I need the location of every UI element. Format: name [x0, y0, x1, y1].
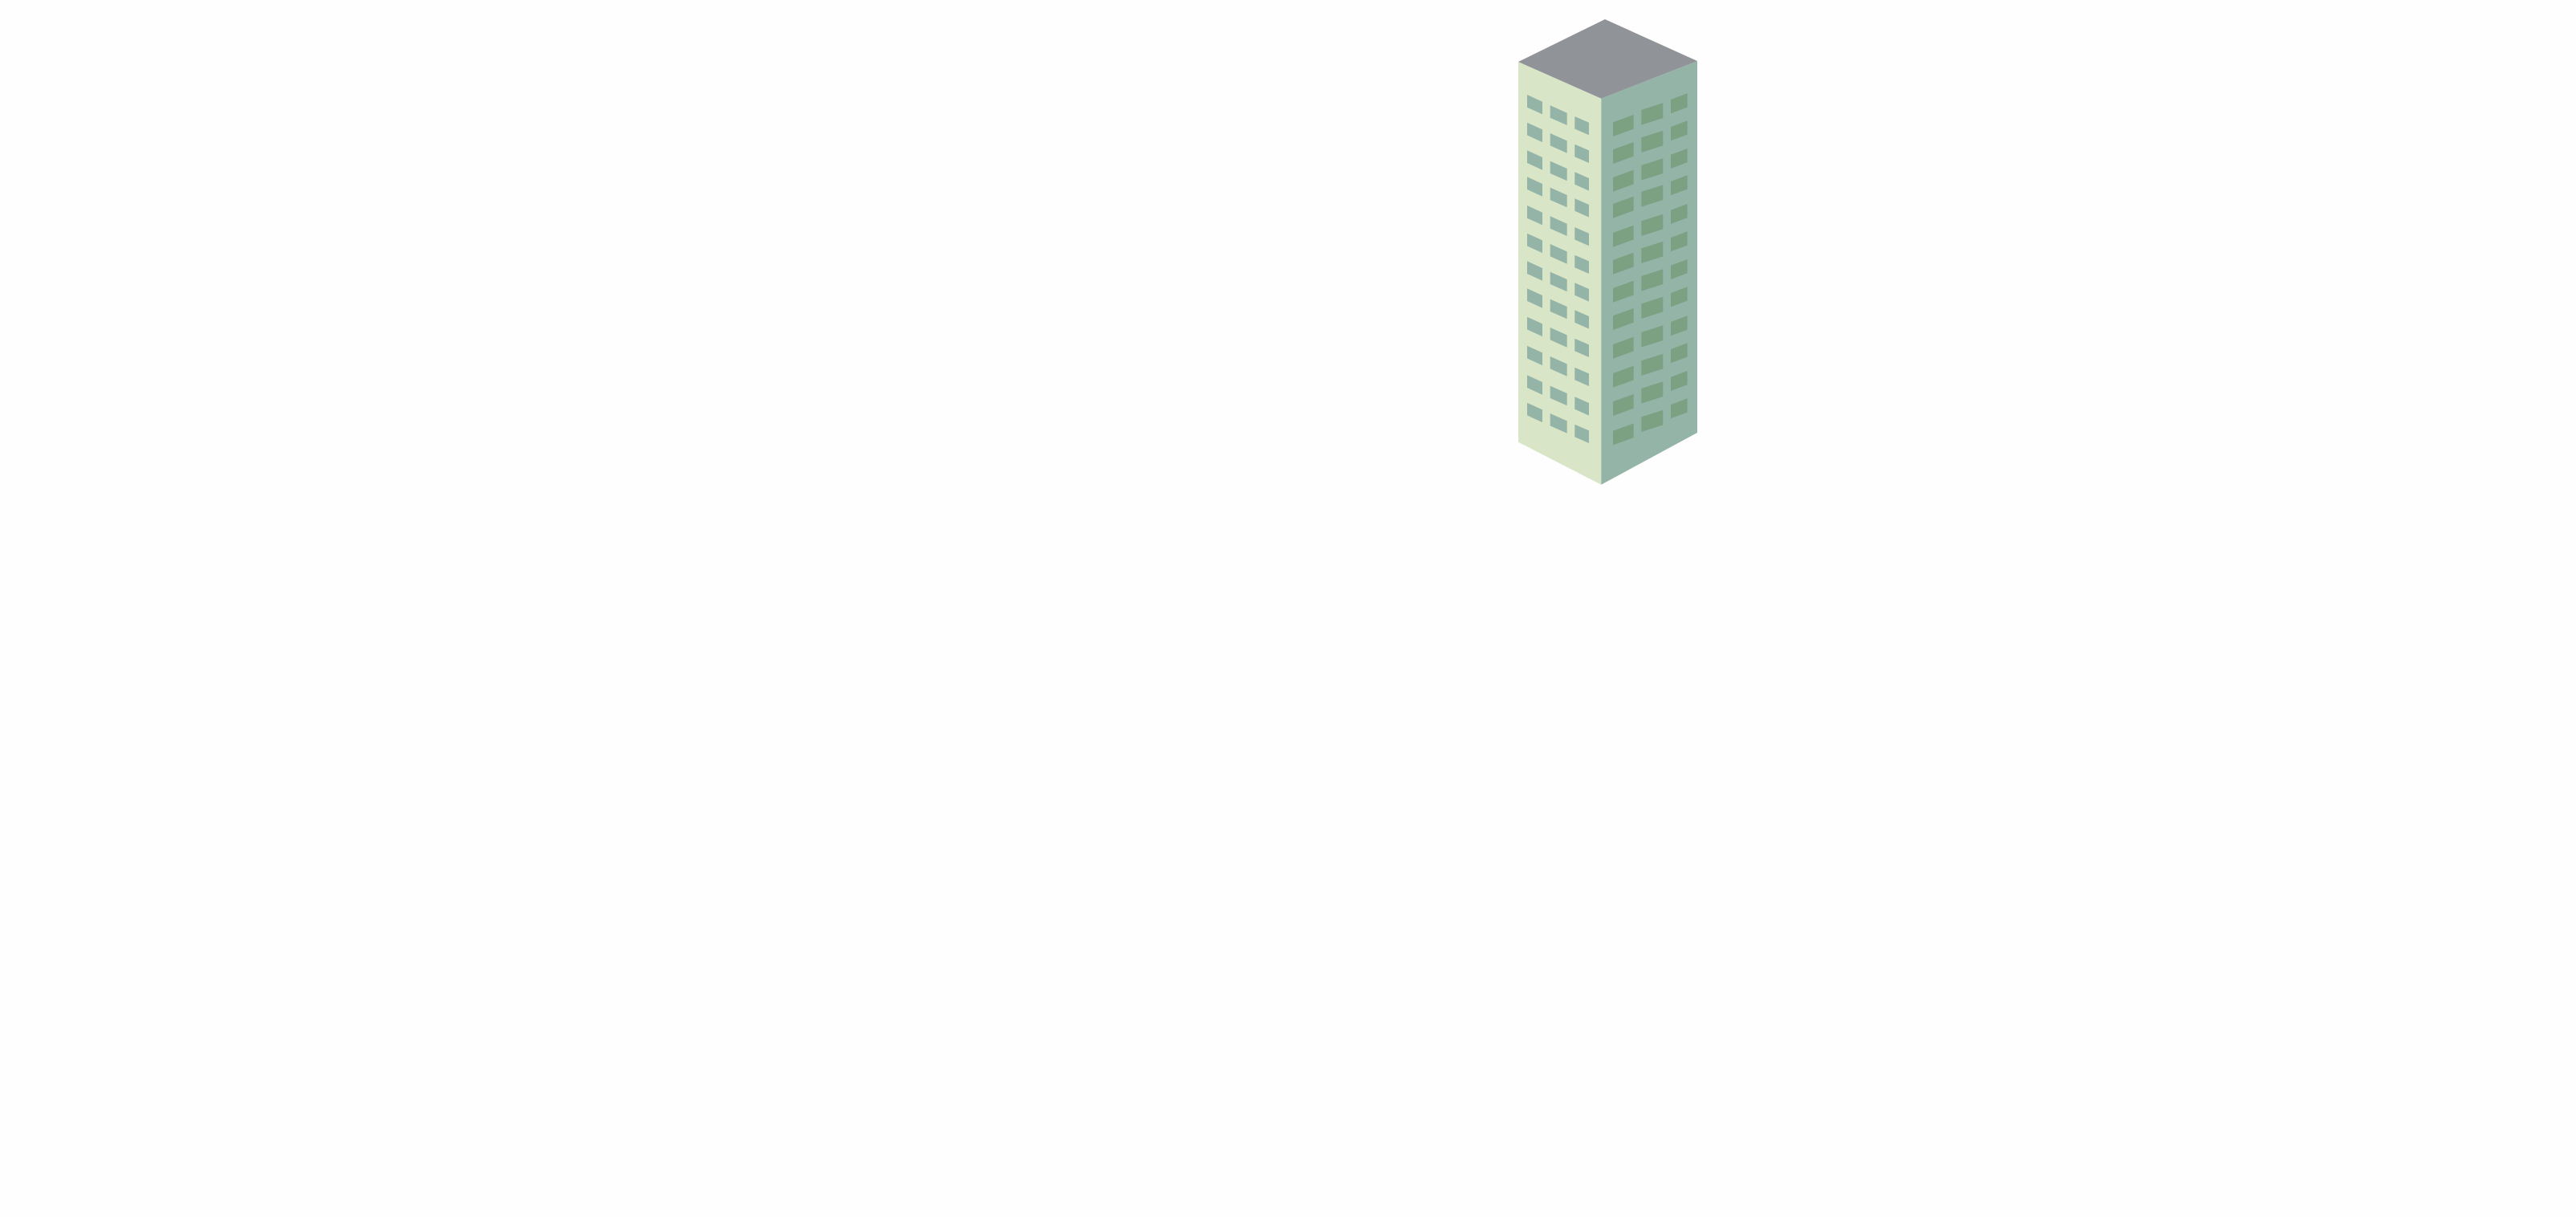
- building left face: [1518, 62, 1601, 485]
- left face windows: [1527, 95, 1589, 443]
- building roof: [1518, 19, 1697, 99]
- right face windows: [1613, 93, 1688, 445]
- building right face: [1601, 61, 1697, 485]
- icon: isometric building: [1518, 19, 1697, 485]
